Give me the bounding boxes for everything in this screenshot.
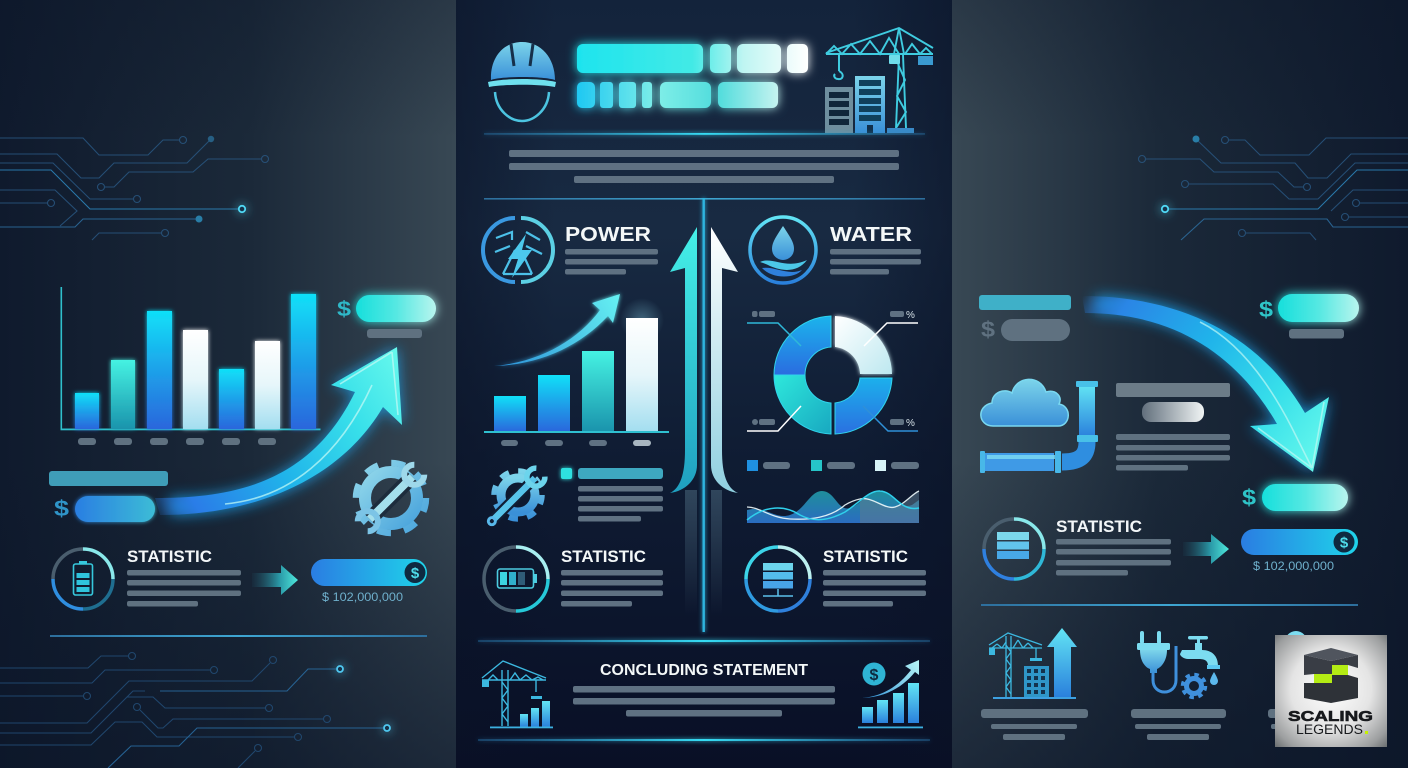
icon: crane, building and rising arrow [989, 628, 1077, 699]
icon: plug and faucet [1137, 631, 1220, 698]
statistic: left battery [53, 547, 241, 609]
icon: rising dollar chart: $ [870, 667, 879, 684]
panel: center [456, 0, 952, 768]
donut chart: water: % [906, 310, 915, 321]
title placeholder bars [577, 44, 808, 108]
power heading: POWER [565, 224, 652, 246]
value pill: right middle [1242, 484, 1348, 511]
value bar: right: $ 102,000,000 [1253, 561, 1334, 573]
circuit traces: right top [1138, 136, 1408, 240]
value pill: right top [1259, 294, 1359, 338]
concluding statement [573, 662, 835, 716]
donut chart: water [747, 310, 918, 434]
concluding statement: CONCLUDING STATEMENT [600, 662, 809, 679]
bar chart: power [484, 294, 669, 446]
icon: crane and data buildings [825, 28, 933, 133]
icon: server ring [746, 547, 810, 611]
intro text bars [509, 150, 899, 183]
logo: Scaling Legends: LEGENDS [1296, 722, 1363, 737]
icon: battery ring [484, 547, 548, 611]
value pill: left top [337, 295, 436, 338]
text block: right bottom captions [981, 709, 1288, 740]
value bar: left: $ 102,000,000 [322, 592, 403, 604]
statistic: center battery [484, 547, 663, 611]
growth arrow: left [155, 347, 402, 515]
legend: water [747, 460, 919, 471]
bar chart: left [60, 287, 320, 445]
value bar: right: $ [1340, 534, 1349, 552]
value pill: left bottom [49, 471, 168, 522]
logo: Scaling Legends [1275, 635, 1387, 747]
circuit traces: left top [0, 136, 268, 240]
value pill: right top: $ [1259, 297, 1273, 322]
statistic: right server [984, 517, 1171, 579]
icon: gear and wrench [356, 463, 426, 533]
arrow: power growth [494, 294, 620, 366]
value labels: right top left: $ [981, 317, 995, 342]
text block: tools [561, 468, 663, 522]
icon: power pylon [483, 218, 553, 282]
statistic: center battery: STATISTIC [561, 547, 646, 566]
icon: water drop [750, 217, 816, 283]
statistic: center server: STATISTIC [823, 547, 908, 566]
circuit traces: left bottom [0, 652, 383, 768]
icon: small crane with bars [482, 661, 553, 728]
statistic: left battery: STATISTIC [127, 547, 212, 566]
icon: cloud and pipe [980, 379, 1098, 473]
icon: gear and wrench center [483, 466, 547, 530]
value bar: right [1241, 529, 1358, 573]
statistic: center server [746, 547, 926, 611]
logo: Scaling Legends: SCALING [1288, 708, 1373, 725]
icon: rising dollar chart [858, 660, 923, 728]
statistic: right server: STATISTIC [1056, 517, 1142, 536]
icon: server ring [984, 519, 1044, 579]
value bar: left [311, 559, 427, 604]
value pill: left bottom: $ [54, 496, 69, 521]
decline arrow: right [1082, 296, 1329, 472]
value labels: right top left [979, 295, 1071, 342]
icon: S cube mark [1304, 648, 1358, 703]
area chart: water [747, 491, 919, 523]
arrow: right small [1183, 534, 1229, 564]
value bar: left: $ [411, 565, 420, 582]
water heading [750, 217, 921, 283]
value pill: right middle: $ [1242, 485, 1256, 510]
value pill: left top: $ [337, 298, 351, 321]
panel: right background and content [952, 0, 1408, 768]
icon: hard hat [488, 42, 556, 121]
icon: battery ring [53, 549, 113, 609]
donut chart: water: % [906, 418, 915, 429]
panel: left background and content [0, 0, 456, 768]
arrow: left small [252, 565, 298, 595]
power heading [483, 218, 658, 282]
central arrows [670, 198, 738, 632]
text block: right middle [1116, 383, 1230, 470]
water heading: WATER [830, 224, 913, 246]
